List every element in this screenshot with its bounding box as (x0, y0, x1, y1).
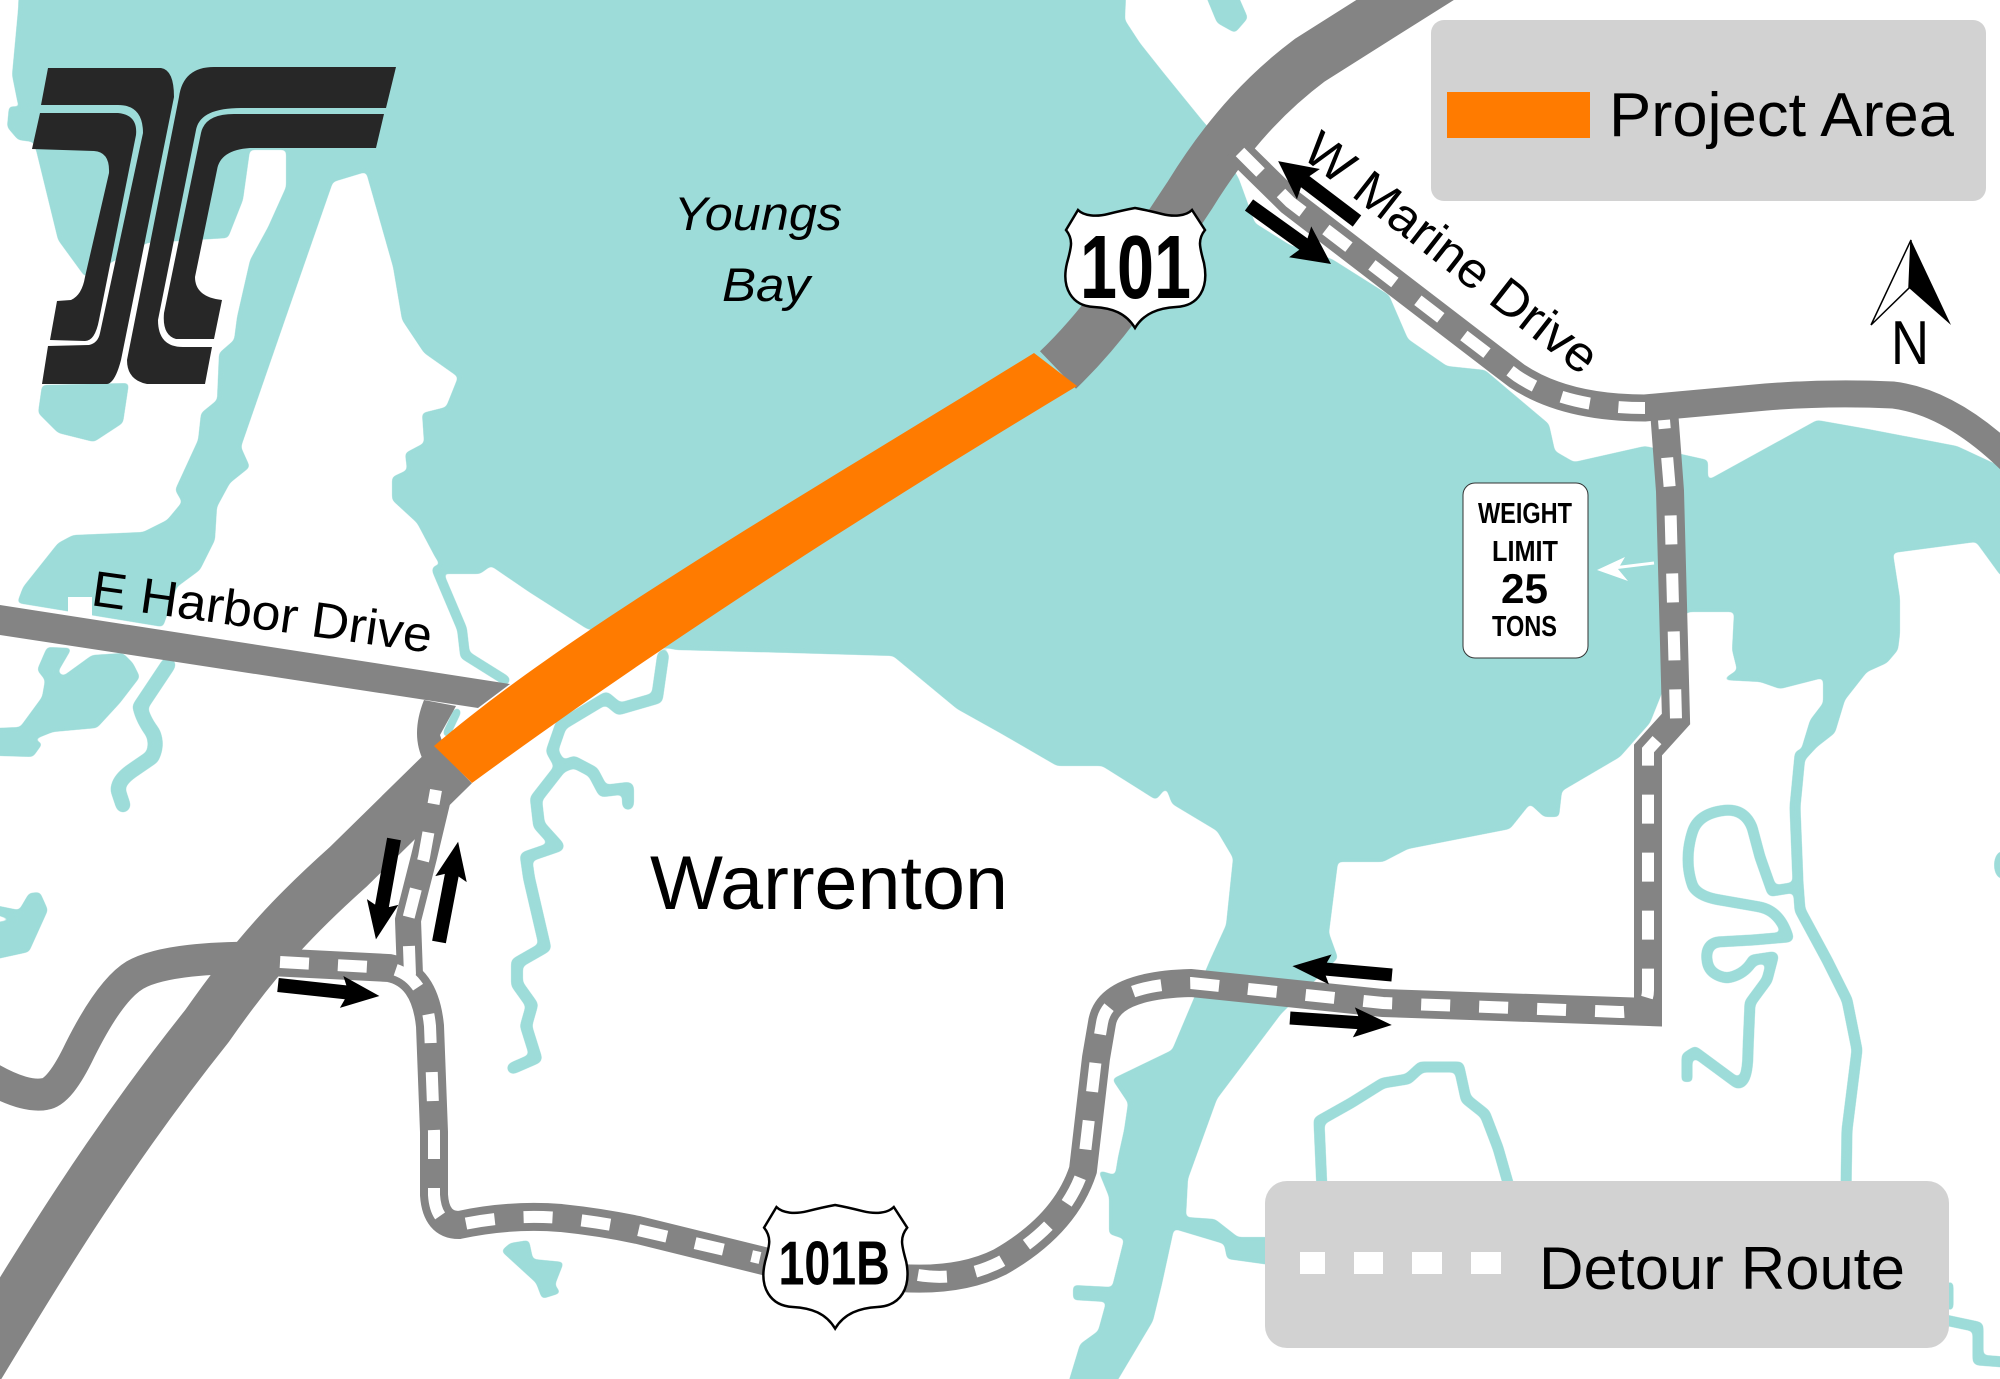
side road west of US 101 (0, 958, 285, 1095)
logo (32, 67, 396, 384)
arrow southbound connector (360, 836, 410, 942)
label Youngs: Youngs (674, 187, 842, 240)
arrow eastbound river crossing (1289, 1003, 1393, 1040)
dashes W Marine Drive (1240, 152, 1645, 408)
top inlet (1195, 0, 1248, 33)
logo outer left band (41, 68, 174, 384)
south east stream (1945, 1320, 2000, 1364)
arrow W Marine westbound (1267, 146, 1368, 236)
arrow W Marine eastbound (1238, 190, 1342, 279)
stream at west (118, 665, 168, 805)
connector from Harbor Drive (417, 700, 456, 762)
weight limit sign: 25 (1501, 565, 1548, 612)
shield US 101B (763, 1205, 907, 1329)
legend: project area: Project Area (1609, 81, 1955, 150)
logo outer right band (127, 67, 396, 384)
legend: detour route: Detour Route (1539, 1235, 1905, 1302)
detour connector north (408, 790, 440, 975)
weight limit sign: WEIGHT (1478, 498, 1572, 530)
north arrow (1871, 240, 1951, 378)
logo inner right band (164, 114, 384, 339)
Warrenton river branch (561, 762, 628, 804)
south river (1319, 1067, 1510, 1190)
arrow westbound river crossing (1291, 951, 1393, 990)
rivers and streams (118, 570, 2000, 1364)
E Harbor Drive road (0, 605, 510, 708)
dashes west to 101B (280, 962, 760, 1258)
legend: project area (1431, 20, 1986, 201)
lake at left edge (0, 892, 48, 965)
traffic direction arrows (276, 146, 1393, 1040)
US 101 north section (1058, 0, 1440, 370)
legend: detour route (1265, 1181, 1949, 1348)
shield US 101 (1065, 208, 1205, 328)
detour road west and south (270, 410, 1676, 1279)
thin stream right of detour legend (1946, 1285, 1954, 1307)
place label Warrenton: Warrenton (650, 841, 1008, 926)
pond near 101B (501, 1240, 564, 1299)
US 101 south section (0, 764, 453, 1379)
east loop river (1687, 810, 1797, 1083)
W Marine Drive road (1235, 148, 2000, 460)
Warrenton river (513, 656, 663, 1068)
marsh south of Harbor Drive (0, 647, 140, 757)
weight limit sign: TONS (1492, 611, 1557, 643)
arrow: pointer to weight limit sign (1597, 557, 1654, 581)
logo inner left band (32, 113, 136, 341)
dashes 101B east to corner (918, 420, 1676, 1277)
road label W Marine Drive: W Marine Drive (1293, 121, 1610, 385)
road label E Harbor Drive: E Harbor Drive (88, 560, 436, 664)
shield US 101: 101 (1080, 218, 1191, 318)
label Bay: Bay (722, 258, 813, 311)
dashes connector (408, 790, 436, 975)
small lobe at right edge (1994, 851, 2000, 879)
stream along bridge (437, 570, 505, 680)
lobe below logo (38, 383, 129, 442)
weight limit sign: LIMIT (1492, 536, 1558, 568)
white patch beside Harbor Drive (68, 597, 92, 617)
shield US 101B: 101B (778, 1229, 890, 1298)
sliver near bridge end (447, 712, 457, 733)
place label Youngs Bay (674, 187, 842, 311)
detour dashes (280, 152, 1676, 1277)
project area bridge (434, 353, 1077, 783)
arrow eastbound west road (276, 969, 381, 1012)
arrow northbound connector (423, 839, 474, 945)
weight limit sign (1463, 483, 1588, 658)
east main river (1795, 755, 1857, 1190)
north arrow: N (1891, 309, 1929, 378)
